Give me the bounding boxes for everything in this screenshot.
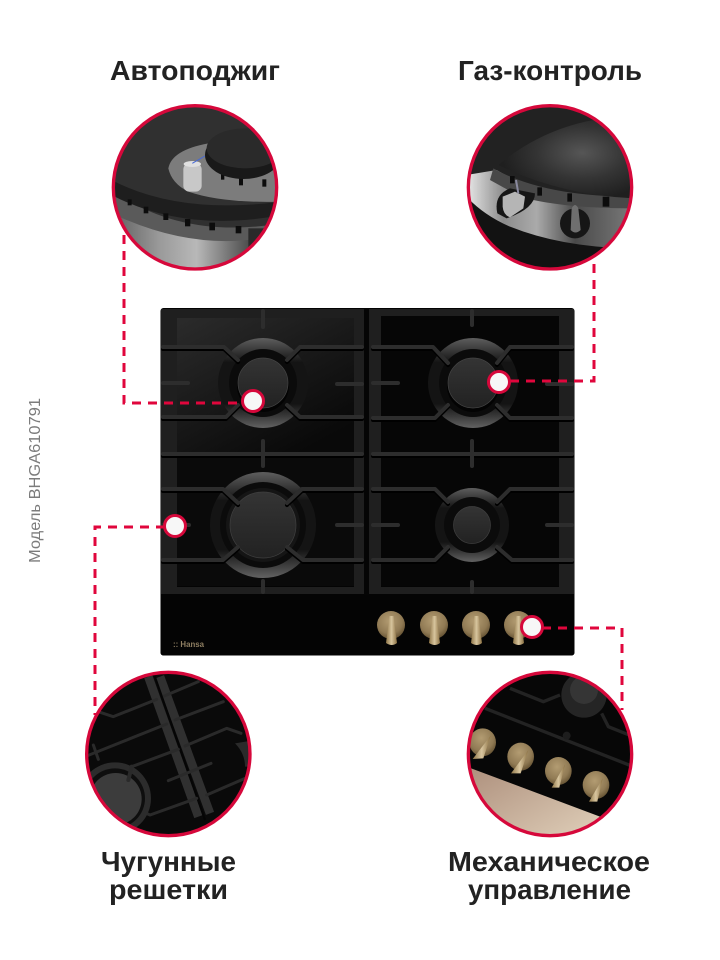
burner: top left (218, 338, 308, 428)
detail circle: cast iron grates (85, 670, 252, 838)
detail circle: autoignition (112, 104, 278, 271)
connector: cast iron grates (95, 527, 165, 715)
heading: Механическое управление: Механическое (448, 846, 650, 877)
heading: Газ-контроль: Газ-контроль (458, 55, 642, 86)
knob 4 (504, 611, 532, 645)
connector: autoignition (124, 235, 245, 403)
bottom control strip (160, 597, 574, 656)
connector: gas control (510, 255, 594, 381)
vertical model label: Модель BHGA610791 (27, 398, 44, 563)
grate bar shadows (163, 349, 572, 562)
burner: bottom right (435, 488, 509, 562)
cooking panels (177, 316, 559, 586)
hob appliance (160, 308, 574, 656)
knob 3 (462, 611, 490, 645)
grate bars (163, 311, 572, 592)
cast iron frame (161, 309, 574, 594)
marker: autoignition (242, 390, 264, 412)
heading: Чугунные решетки (101, 846, 236, 905)
knob 2 (420, 611, 448, 645)
detail circle: gas control (466, 104, 634, 271)
heading: Механическое управление (448, 846, 650, 905)
centre gap (364, 308, 369, 595)
burner: bottom left (210, 472, 316, 578)
heading: Механическое управление: управление (468, 874, 631, 905)
knob 1 (377, 611, 405, 645)
connector: mechanical control (542, 628, 622, 710)
marker: mechanical control (522, 616, 542, 638)
burner: top right (428, 338, 518, 428)
marker: cast iron grates (164, 516, 186, 536)
heading: Чугунные решетки: решетки (109, 874, 228, 905)
hob body (160, 308, 574, 656)
brand logo: :: Hansa (173, 640, 205, 649)
heading: Автоподжиг: Автоподжиг (110, 55, 280, 86)
marker: gas control (488, 372, 510, 392)
detail circle: mechanical control (466, 670, 634, 838)
heading: Чугунные решетки: Чугунные (101, 846, 236, 877)
